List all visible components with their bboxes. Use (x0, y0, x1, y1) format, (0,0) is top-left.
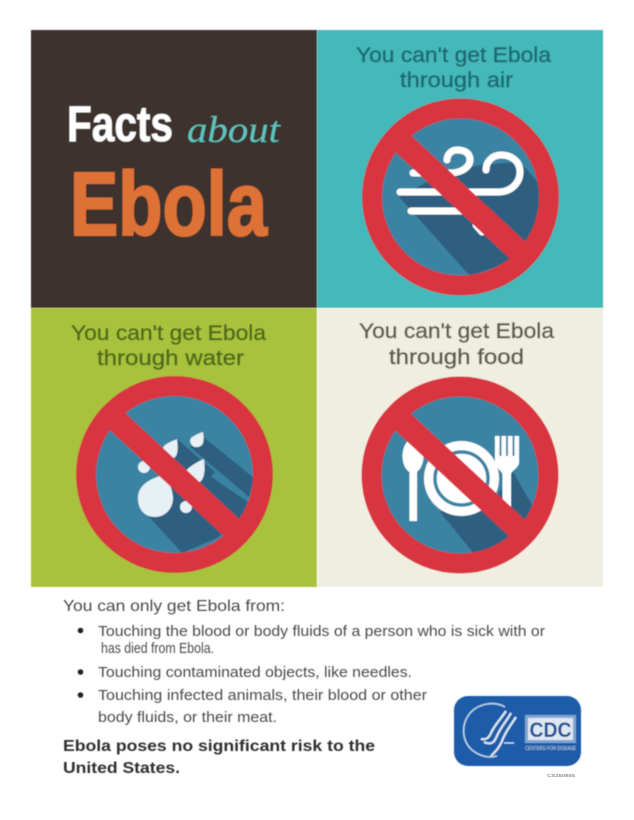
heading: through air (356, 44, 551, 92)
callout: risk statement: Ebola poses no significant risk to the (63, 738, 375, 755)
heading: about: about (187, 110, 282, 151)
heading: through air: You can't get Ebola (356, 44, 551, 67)
text block: how you can get Ebola (63, 598, 545, 726)
callout: risk statement: United States. (63, 760, 180, 777)
icon: no water (86, 386, 263, 563)
heading: through water: You can't get Ebola (71, 322, 266, 345)
text: publication code: CS250885 (547, 773, 576, 778)
panel: food (317, 308, 603, 587)
panel: water (31, 308, 317, 587)
heading: Facts: Facts (67, 96, 173, 152)
callout: risk statement (63, 738, 375, 777)
logo: CDC: CENTERS FOR DISEASE (525, 746, 577, 752)
logo: CDC: CDC (530, 719, 572, 742)
bullet list: Touching contaminated objects, like needles. (98, 665, 412, 681)
bullet list: has died from Ebola. (101, 641, 214, 657)
heading: through food: through food (389, 346, 524, 369)
bullet list: Touching infected animals, their blood or other (98, 688, 427, 704)
bullet list (78, 624, 545, 726)
heading: through air: through air (400, 69, 513, 92)
bullet list: Touching the blood or body fluids of a person who is sick with or (98, 624, 545, 640)
text block: how you can get Ebola: You can only get Ebola from: (63, 598, 285, 615)
heading: through food: You can't get Ebola (359, 320, 554, 343)
logo: CDC (454, 696, 581, 766)
panel: air (317, 30, 603, 308)
icon: no food (372, 386, 548, 564)
heading: through water (71, 322, 266, 370)
bullet list: body fluids, or their meat. (98, 710, 277, 726)
heading: Ebola: Ebola (70, 155, 268, 255)
heading: through water: through water (97, 347, 244, 370)
panel: title (31, 30, 317, 308)
heading: through food (359, 320, 554, 369)
icon: no air (372, 108, 549, 286)
